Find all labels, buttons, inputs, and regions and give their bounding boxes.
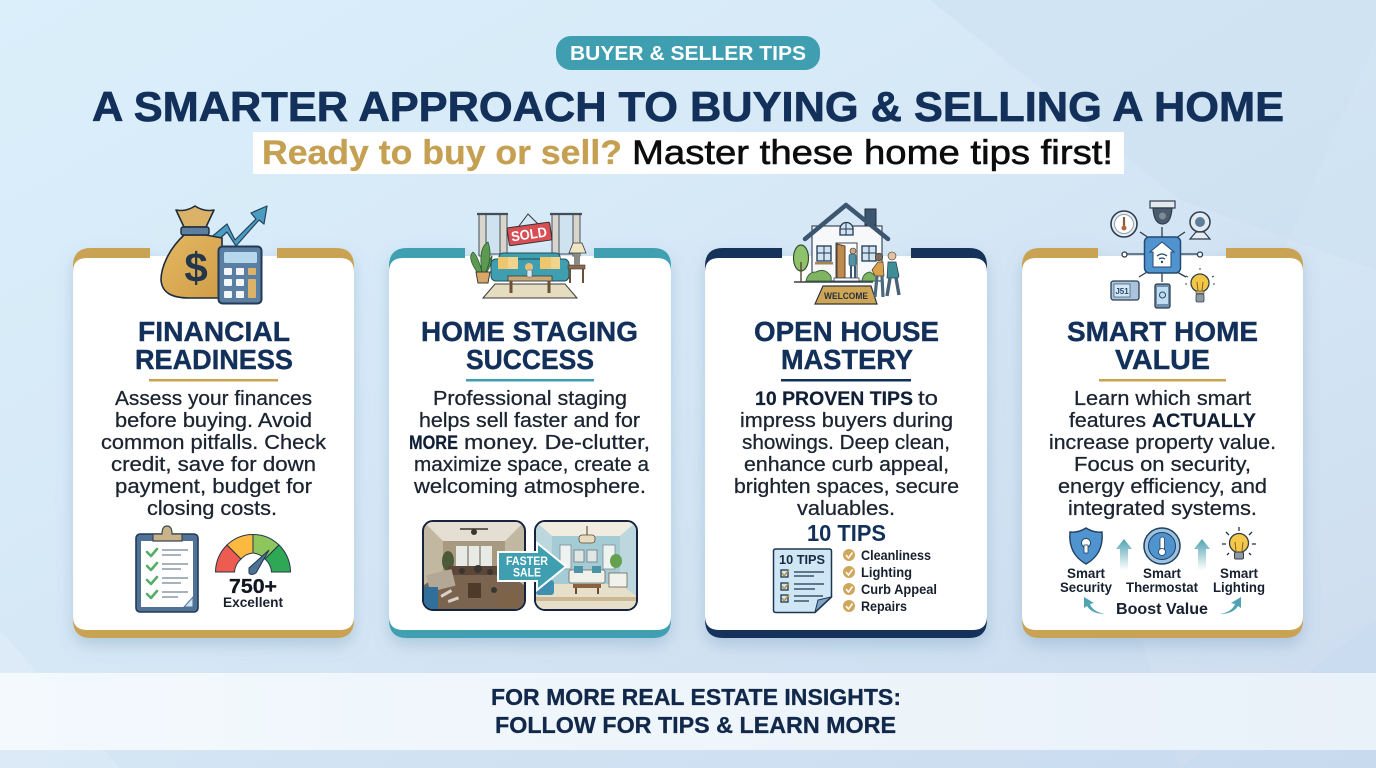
body text (1049, 387, 1276, 520)
heading: MASTERY (781, 344, 913, 375)
heading: VALUE (1115, 344, 1210, 375)
body text: energy efficiency, and (1058, 475, 1267, 498)
subtitle: Master these home tips first! (632, 134, 1113, 172)
body text: to (918, 387, 938, 410)
icon labels: Security (1060, 580, 1112, 595)
body text: integrated systems. (1068, 497, 1257, 520)
checklist: Repairs (861, 599, 907, 614)
boost value with arrows (1084, 597, 1241, 618)
icon: connected smart home hub (1111, 201, 1215, 308)
icon: money bag, growth arrow and calculator: $ (184, 244, 208, 291)
badge: buyer and seller tips: BUYER & SELLER TIPS (570, 43, 806, 65)
chart: credit score gauge: Excellent (223, 595, 284, 610)
title: A SMARTER APPROACH TO BUYING & SELLING A HOME (92, 83, 1284, 130)
icon: smart lighting bulb (1222, 527, 1256, 559)
body text (734, 387, 959, 520)
icon labels: Smart (1067, 566, 1106, 581)
panel: open house mastery (705, 205, 987, 638)
icon: smart security shield (1070, 528, 1102, 564)
icon: tips document: 10 TIPS (779, 552, 825, 567)
panel: home staging success (389, 214, 671, 638)
icon labels: Thermostat (1126, 580, 1198, 595)
icon: house with welcome mat and visitors (794, 205, 899, 304)
checklist: Cleanliness (861, 548, 931, 563)
photo: staged room after (535, 521, 637, 610)
icon labels: Smart (1143, 566, 1182, 581)
body text: enhance curb appeal, (744, 453, 949, 476)
heading: READINESS (135, 344, 293, 375)
body text: money. De-clutter, (464, 431, 650, 454)
icon labels (1060, 566, 1265, 595)
body text: increase property value. (1049, 431, 1276, 454)
heading: OPEN HOUSE (754, 316, 939, 347)
body text: helps sell faster and for (419, 409, 640, 432)
icon: staged living room with sold sign: SOLD (510, 224, 548, 244)
arrow: faster sale (498, 543, 566, 590)
body text: Focus on security, (1074, 453, 1251, 476)
body text: payment, budget for (115, 475, 312, 498)
body text: valuables. (797, 497, 895, 520)
heading (1067, 316, 1258, 375)
panel: financial readiness (73, 206, 354, 638)
icon: tips document (774, 549, 832, 612)
body text: features (1069, 409, 1146, 432)
footer band: FOR MORE REAL ESTATE INSIGHTS: (491, 684, 901, 710)
icon: staged living room with sold sign (471, 214, 586, 298)
footer band (0, 673, 1376, 750)
body text: welcoming atmosphere. (413, 475, 646, 498)
icon labels: Smart (1220, 566, 1259, 581)
body text: closing costs. (147, 497, 277, 520)
checklist: Curb Appeal (861, 582, 937, 597)
body text: showings. Deep clean, (742, 431, 950, 454)
icon: checklist clipboard (136, 526, 198, 612)
body text: maximize space, create a (414, 453, 650, 476)
heading: SMART HOME (1067, 316, 1258, 347)
chart: credit score gauge: 750+ (229, 576, 277, 598)
icon labels: Lighting (1213, 580, 1265, 595)
footer band: FOLLOW FOR TIPS & LEARN MORE (495, 712, 896, 738)
panel: smart home value (1022, 201, 1303, 638)
heading: HOME STAGING (421, 316, 638, 347)
chart: credit score gauge (216, 534, 290, 610)
checklist (843, 548, 937, 614)
checklist: Lighting (861, 565, 912, 580)
body text (409, 387, 650, 498)
photo: cluttered room before (423, 521, 525, 610)
heading: SUCCESS (466, 344, 594, 375)
icon: smart thermostat (1144, 528, 1180, 564)
body text: Assess your finances (115, 387, 312, 410)
heading (421, 316, 638, 375)
body text: impress buyers during (740, 409, 953, 432)
arrow: faster sale: SALE (513, 568, 541, 580)
body text: credit, save for down (111, 453, 316, 476)
boost value with arrows: Boost Value (1116, 601, 1208, 618)
body text: 10 PROVEN TIPS (755, 388, 913, 410)
body text (101, 387, 327, 520)
arrow: up (1116, 539, 1132, 570)
body text: common pitfalls. Check (101, 431, 327, 454)
subheading: 10 tips: 10 TIPS (807, 520, 886, 546)
body text: Professional staging (433, 387, 627, 410)
body text: ACTUALLY (1152, 410, 1256, 432)
badge: buyer and seller tips (556, 36, 820, 70)
arrow: faster sale: FASTER (506, 556, 549, 568)
body text: Learn which smart (1074, 387, 1251, 410)
subtitle (253, 132, 1124, 174)
icon: connected smart home hub: J51 (1115, 287, 1129, 296)
arrow: up (1194, 539, 1210, 570)
heading (754, 316, 939, 375)
body text: before buying. Avoid (115, 409, 312, 432)
body text: brighten spaces, secure (734, 475, 959, 498)
heading (135, 316, 293, 375)
subtitle: Ready to buy or sell? (262, 134, 622, 172)
body text: MORE (409, 432, 458, 454)
icon: house with welcome mat and visitors: WELCOME (824, 291, 868, 302)
heading: FINANCIAL (138, 316, 290, 347)
icon: money bag, growth arrow and calculator (161, 206, 267, 304)
